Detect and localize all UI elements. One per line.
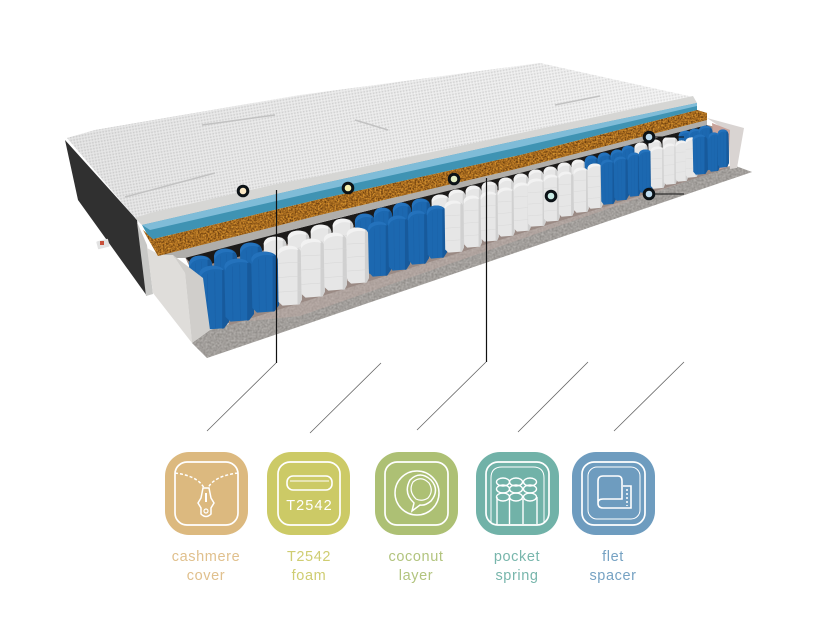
label: cashmere cover: cashmere	[172, 549, 240, 565]
label: T2542 foam: foam	[292, 568, 326, 584]
small label tag	[96, 239, 110, 249]
icon: T2542 foam: T2542	[286, 498, 333, 514]
concrete base	[192, 165, 752, 358]
left foam end block	[137, 222, 210, 343]
mattress cashmere top cover	[67, 63, 697, 225]
icon: pocket spring	[476, 452, 559, 535]
icon: flet spacer	[572, 452, 655, 535]
leader lines	[207, 137, 684, 433]
label: pocket spring: spring	[495, 568, 539, 584]
right end block	[707, 118, 744, 170]
front row of pocket springs	[199, 129, 729, 330]
label: pocket spring: pocket	[494, 549, 540, 565]
grey spacer under coconut	[158, 120, 707, 258]
coconut layer	[143, 110, 707, 256]
label: flet spacer: spacer	[589, 568, 637, 584]
icon: coconut	[375, 452, 458, 535]
label: cashmere cover: cover	[187, 568, 225, 584]
icon: cashmere cover zipper	[165, 452, 248, 535]
blue T2542 foam layer	[142, 103, 697, 239]
cover rolled edge	[135, 96, 697, 225]
back wall behind springs	[185, 125, 728, 325]
cover faint markings	[125, 96, 600, 197]
label: coconut layer: layer	[399, 568, 433, 584]
label: T2542 foam: T2542	[287, 549, 331, 565]
icon: T2542 foam	[267, 452, 350, 535]
label: flet spacer: flet	[602, 549, 624, 565]
back row of pocket springs	[189, 125, 713, 317]
mattress dark side	[65, 140, 147, 296]
marker dots	[238, 132, 654, 201]
label: coconut layer: coconut	[388, 549, 444, 565]
